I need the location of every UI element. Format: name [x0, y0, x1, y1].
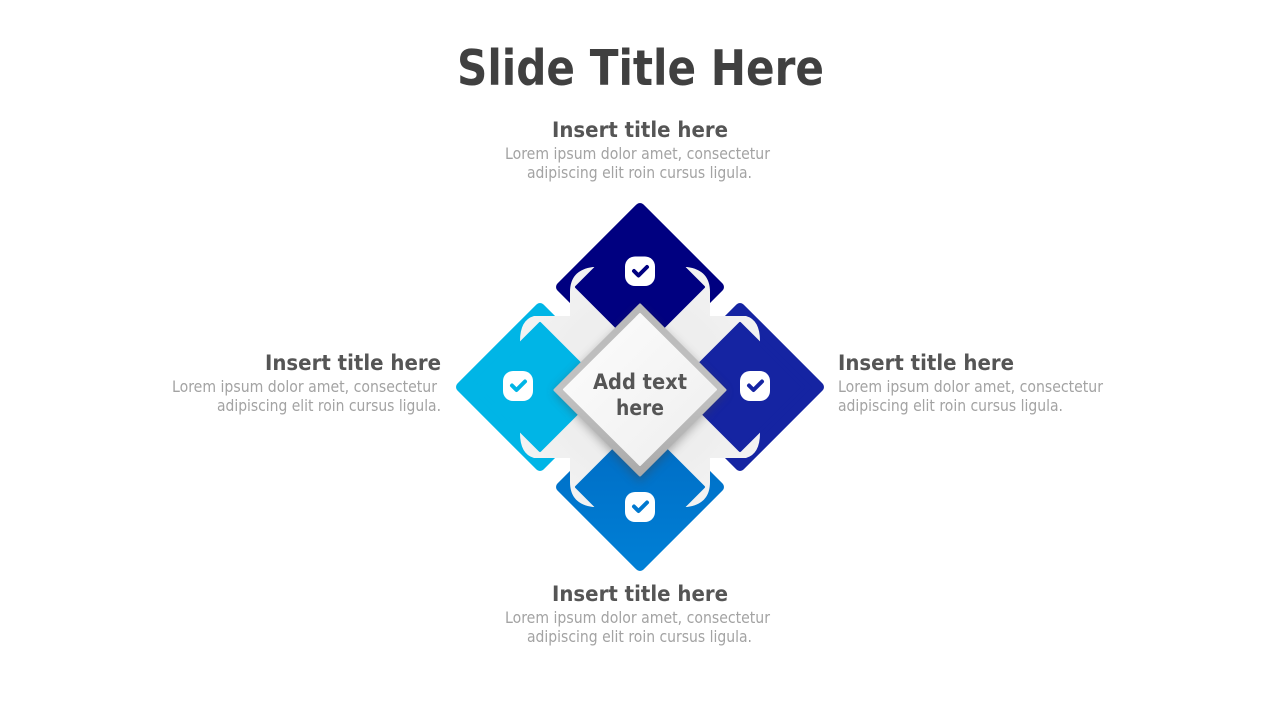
icon: bottom check: [625, 492, 655, 522]
icon: right check: [740, 371, 770, 401]
text block: top: adipiscing elit roin cursus ligula.: [527, 163, 752, 182]
center diamond: [555, 305, 725, 475]
diamond: right outer: [661, 308, 819, 466]
text block: left: adipiscing elit roin cursus ligula.: [217, 396, 441, 415]
diamond: left outer: [461, 308, 619, 466]
diagram: four-diamond cluster: [461, 208, 819, 566]
text block: right: Insert title here: [838, 351, 1014, 375]
diamond: top inner: [576, 224, 704, 350]
icon: top check: [625, 256, 655, 286]
text block: bottom: [505, 582, 770, 646]
text block: left: [172, 351, 441, 415]
text block: top: [505, 118, 770, 182]
text block: right: adipiscing elit roin cursus ligula.: [838, 396, 1063, 415]
text block: right: Lorem ipsum dolor amet, consectetur: [838, 377, 1103, 396]
center text: Add text: [593, 370, 687, 394]
text block: top: Lorem ipsum dolor amet, consectetur: [505, 144, 770, 163]
text block: right: [838, 351, 1103, 415]
diamond: top outer: [561, 208, 719, 366]
text block: top: Insert title here: [552, 118, 728, 142]
center text: [593, 370, 687, 420]
text block: bottom: adipiscing elit roin cursus ligula.: [527, 627, 752, 646]
center text: here: [616, 396, 664, 420]
center diamond shadow: [554, 308, 726, 482]
icon: left check: [503, 371, 533, 401]
diamond: right inner: [676, 324, 804, 450]
title: Slide Title Here: [457, 40, 824, 97]
connector: light gray cross with curved notches: [520, 267, 760, 507]
diamond: left inner: [476, 324, 604, 450]
text block: left: Insert title here: [265, 351, 441, 375]
text block: left: Lorem ipsum dolor amet, consectetur: [172, 377, 437, 396]
diamond: bottom inner: [576, 424, 704, 550]
text block: bottom: Lorem ipsum dolor amet, consectetur: [505, 608, 770, 627]
diamond: bottom outer: [561, 408, 719, 566]
text block: bottom: Insert title here: [552, 582, 728, 606]
